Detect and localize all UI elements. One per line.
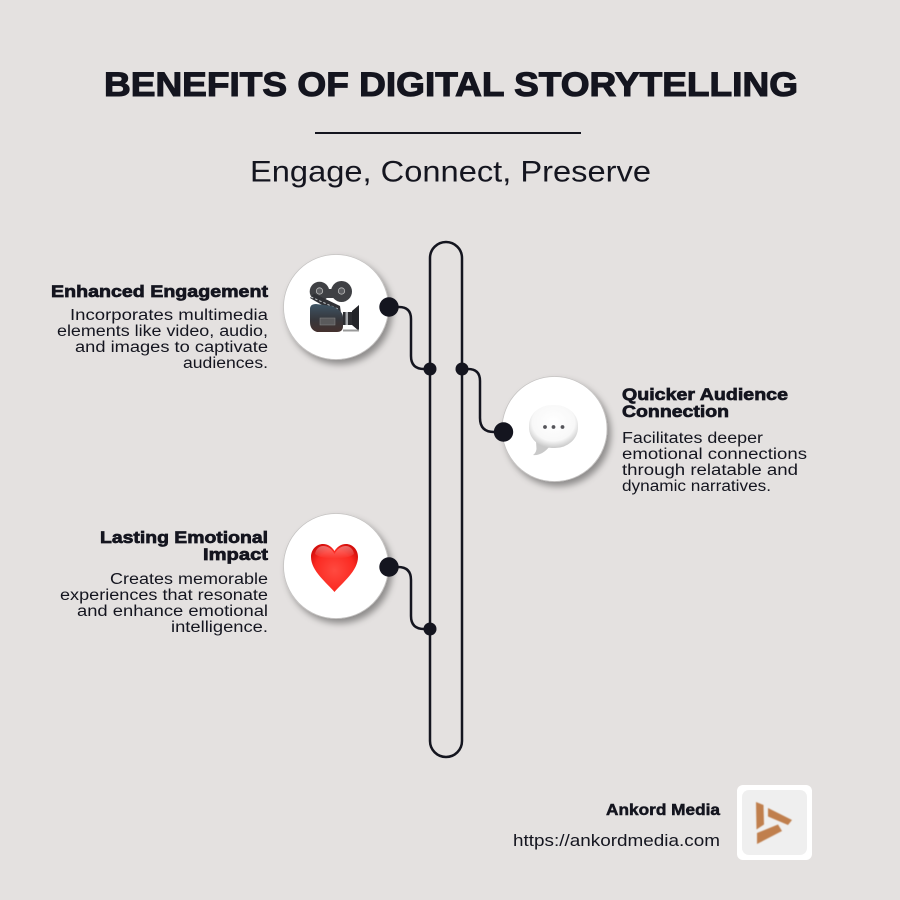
connector: engagement to track [379, 297, 436, 376]
text: enhanced engagement heading: Enhanced Engagement [51, 282, 268, 301]
text: lasting emotional impact heading: Impact [203, 545, 268, 564]
text: enhanced engagement description [57, 307, 268, 372]
footer: brand name: Ankord Media [606, 802, 720, 819]
text: quicker audience connection heading: Quicker Audience [622, 385, 788, 404]
text: lasting emotional impact description: experiences that resonate [60, 587, 268, 604]
text: quicker audience connection heading: Connection [622, 402, 729, 421]
text: lasting emotional impact description [60, 571, 268, 636]
text: enhanced engagement description: audiences. [183, 355, 268, 372]
connector: lasting impact to track [379, 557, 436, 636]
title: BENEFITS OF DIGITAL STORYTELLING [104, 66, 798, 104]
text: quicker audience connection heading [622, 385, 788, 421]
item: lasting emotional impact [60, 514, 436, 636]
connector: track to quicker connection [456, 362, 513, 442]
text: lasting emotional impact description: and enhance emotional [77, 603, 268, 620]
text: quicker audience connection description: emotional connections [622, 446, 807, 463]
text: enhanced engagement description: Incorporates multimedia [70, 307, 268, 324]
item: enhanced engagement [51, 254, 436, 376]
item: quicker audience connection [456, 362, 807, 495]
icon circle: red heart [284, 514, 388, 618]
logo [737, 785, 812, 860]
text: lasting emotional impact description: intelligence. [171, 619, 268, 636]
text: quicker audience connection description: through relatable and [622, 462, 798, 479]
timeline: rounded pill track [430, 242, 462, 757]
icon circle: movie camera [284, 254, 388, 360]
subtitle: Engage, Connect, Preserve [250, 156, 651, 188]
text: enhanced engagement description: and images to captivate [75, 339, 268, 356]
text: quicker audience connection description: dynamic narratives. [622, 478, 771, 495]
footer: website url: https://ankordmedia.com [513, 831, 720, 850]
text: quicker audience connection description: Facilitates deeper [622, 430, 763, 447]
text: enhanced engagement description: elements like video, audio, [57, 323, 268, 340]
icon circle: speech bubble [502, 376, 607, 482]
text: lasting emotional impact heading: Lasting Emotional [100, 528, 268, 547]
text: lasting emotional impact heading [100, 528, 268, 564]
text: quicker audience connection description [622, 430, 807, 495]
text: lasting emotional impact description: Creates memorable [110, 571, 268, 588]
